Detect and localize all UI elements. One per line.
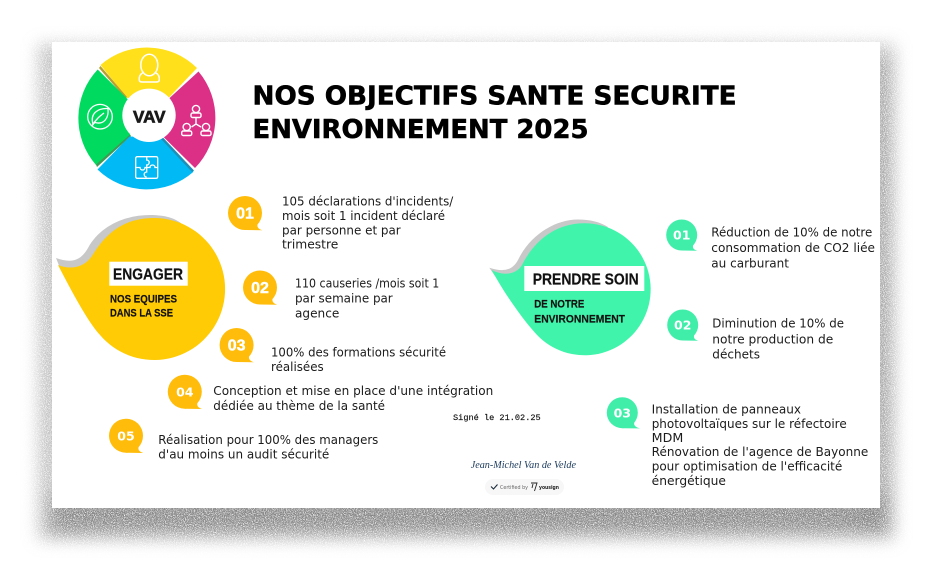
- bubble body: [492, 223, 651, 355]
- text: engager 01: mois soit 1 incident déclaré: [282, 209, 445, 223]
- heading: ENGAGER: [113, 266, 183, 284]
- heading: PRENDRE SOIN: [533, 272, 639, 288]
- text: engager 01: trimestre: [282, 237, 338, 251]
- panel shadow: [38, 44, 895, 540]
- badge: engager 03: [220, 328, 254, 362]
- subheading: ENVIRONNEMENT: [534, 313, 625, 325]
- badge: engager 02: 02: [251, 280, 269, 297]
- segment: yellow: [100, 48, 197, 98]
- bubble shadow crescent: [489, 220, 608, 285]
- signature date: Signé le 21.02.25: [453, 413, 541, 423]
- text: environnement 03: MDM: [652, 431, 683, 445]
- text: engager 01: [282, 195, 454, 251]
- panel: engager bubble: [56, 215, 225, 360]
- icon: check mark: [491, 484, 498, 489]
- text: engager 01: 105 déclarations d'incidents/: [282, 195, 454, 209]
- title: ENVIRONNEMENT 2025: [252, 115, 588, 145]
- text: environnement 03: pour optimisation de l'efficacité: [652, 459, 842, 473]
- icon: leaf: [88, 104, 112, 129]
- text: engager 01: par personne et par: [282, 223, 401, 237]
- subheading: NOS EQUIPES: [110, 294, 177, 306]
- badge: environnement 03: 03: [614, 405, 631, 420]
- title: NOS OBJECTIFS SANTE SECURITE: [252, 82, 736, 112]
- text: engager 03: réalisées: [271, 360, 324, 374]
- text: environnement 02: [712, 317, 844, 362]
- title: [252, 82, 736, 145]
- logo letters: VAV: [133, 108, 166, 126]
- badge: engager 03: 03: [228, 338, 246, 354]
- subheading: DANS LA SSE: [110, 308, 173, 320]
- badge: engager 05: 05: [117, 428, 135, 443]
- wheel logo: [78, 48, 215, 189]
- segment: pink: [164, 72, 215, 168]
- text: environnement 01: consommation de CO2 liée: [711, 241, 875, 255]
- subheading: [534, 298, 625, 325]
- badge: environnement 03: [607, 397, 640, 428]
- icon: network: [182, 105, 211, 136]
- logo centre: [122, 89, 176, 142]
- text: engager 04: [213, 384, 493, 413]
- text: environnement 03: Installation de panneaux: [652, 402, 801, 416]
- text: environnement 03: énergétique: [652, 474, 726, 488]
- bubble shadow crescent: [56, 215, 182, 280]
- certified by yousign badge: yousign: [539, 485, 559, 491]
- text: environnement 01: au carburant: [711, 256, 789, 270]
- text: environnement 02: déchets: [712, 348, 760, 362]
- heading box: [524, 266, 644, 291]
- text: engager 03: 100% des formations sécurité: [271, 346, 446, 360]
- heading box: [109, 262, 188, 286]
- subheading: [110, 294, 177, 320]
- segment: blue: [98, 136, 194, 189]
- badge: environnement 01: [666, 220, 697, 251]
- badge: environnement 02: 02: [674, 318, 691, 333]
- white panel: [52, 42, 880, 508]
- text: environnement 03: [652, 402, 868, 488]
- bubble body: [58, 218, 225, 360]
- badge: engager 05: [109, 419, 143, 453]
- icon: puzzle: [136, 157, 158, 178]
- text: engager 05: d'au moins un audit sécurité: [158, 447, 329, 461]
- text: engager 02: [295, 277, 439, 321]
- text: engager 04: Conception et mise en place d'une intégration: [213, 384, 493, 398]
- badge: environnement 01: 01: [673, 228, 690, 243]
- panel: prendre soin bubble: [489, 220, 651, 355]
- text: environnement 02: Diminution de 10% de: [712, 317, 844, 331]
- text: environnement 03: photovoltaïques sur le réfectoire: [652, 417, 847, 431]
- text: engager 02: agence: [295, 307, 339, 321]
- badge: engager 02: [243, 270, 277, 305]
- text: engager 03: [271, 346, 446, 374]
- badge: engager 04: [168, 375, 202, 409]
- badge: environnement 02: [667, 310, 698, 341]
- text: environnement 01: Réduction de 10% de notre: [711, 226, 872, 240]
- text: engager 02: par semaine par: [295, 292, 393, 306]
- signature name: Jean-Michel Van de Velde: [471, 460, 576, 471]
- text: engager 05: [158, 433, 378, 461]
- text: environnement 01: [711, 226, 875, 270]
- text: engager 04: dédiée au thème de la santé: [213, 399, 385, 413]
- badge: engager 04: 04: [176, 384, 194, 399]
- badge: engager 01: 01: [236, 206, 254, 222]
- certified by yousign badge: [485, 479, 564, 495]
- text: environnement 02: notre production de: [712, 332, 833, 346]
- subheading: DE NOTRE: [534, 298, 584, 310]
- text: environnement 03: Rénovation de l'agence de Bayonne: [652, 445, 868, 459]
- text: engager 02: 110 causeries /mois soit 1: [295, 277, 439, 291]
- icon: person: [139, 54, 159, 82]
- badge: engager 01: [228, 196, 262, 230]
- certified by yousign badge: Certified by: [500, 485, 528, 491]
- icon: yousign mark: [531, 483, 537, 491]
- segment: green: [78, 70, 130, 165]
- text: engager 05: Réalisation pour 100% des managers: [158, 433, 378, 447]
